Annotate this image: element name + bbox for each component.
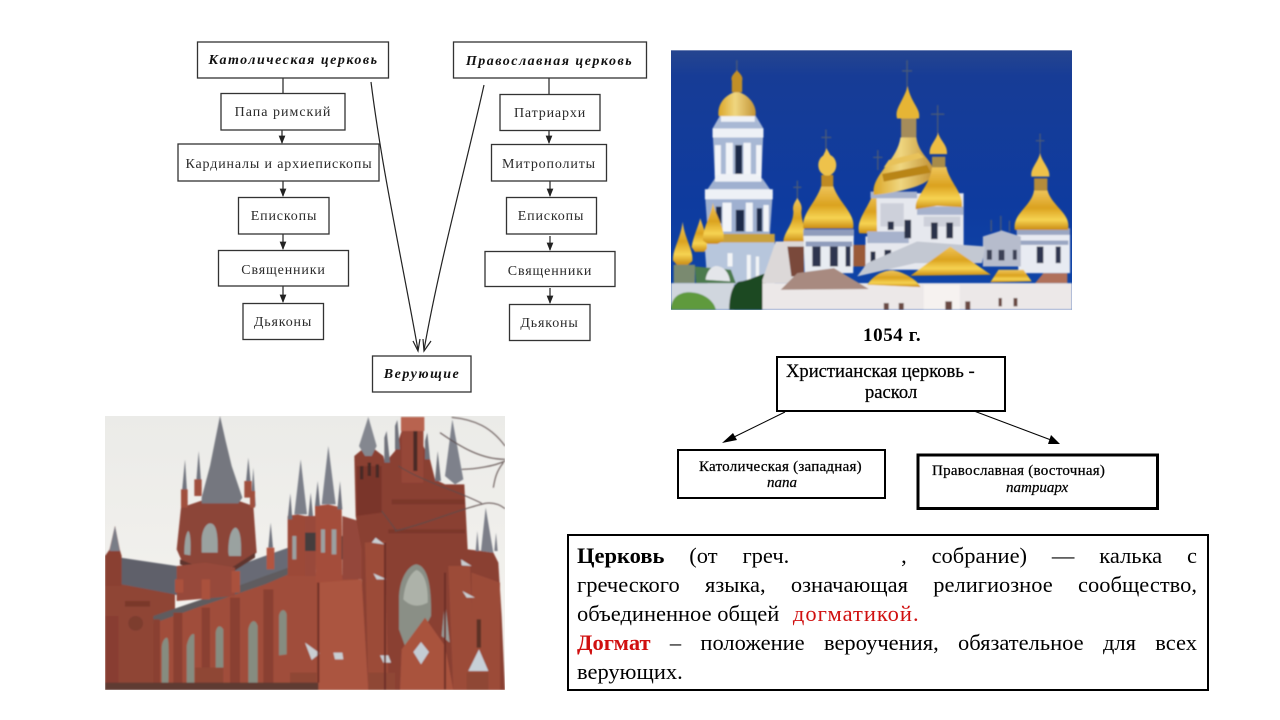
box: Priests left: Священники <box>241 263 326 278</box>
right church <box>1017 230 1070 273</box>
architecture <box>671 60 1072 310</box>
crosses <box>737 60 1044 232</box>
mid-left white block <box>762 242 804 283</box>
box: Bishops left <box>238 198 329 234</box>
box: Deacons left: Дьяконы <box>254 315 312 330</box>
windows <box>162 601 353 690</box>
box: Catholic western <box>678 450 885 498</box>
box: Orthodox eastern: Православная (восточная) <box>932 463 1105 479</box>
portal <box>400 618 453 690</box>
lines of brick shadow <box>318 543 445 690</box>
definition text box: Догмат – положение вероучения, обязательное для всех <box>577 630 1197 655</box>
box: Catholic western: Католическая (западная) <box>699 459 862 475</box>
bare branches <box>382 417 505 531</box>
box: Pope: Папа римский <box>235 105 331 120</box>
box: Metropolitans <box>492 144 606 181</box>
box: Catholic church <box>198 42 388 78</box>
dome 370 <box>783 198 806 243</box>
box: Orthodox church <box>454 42 646 78</box>
box: Christian church schism <box>777 357 1005 411</box>
definition text box <box>567 534 1209 691</box>
box: Christian church schism: раскол <box>865 382 917 403</box>
bell tower dome <box>718 92 756 116</box>
buttress pinnacle towers <box>288 514 307 576</box>
box: Believers: Верующие <box>383 367 460 382</box>
box: Pope <box>221 94 345 130</box>
box: Catholic western: папа <box>767 475 797 491</box>
small stone caps <box>305 538 475 663</box>
box: Bishops right <box>506 198 596 234</box>
sky <box>105 416 505 690</box>
left wing <box>105 583 175 690</box>
box: Deacons right <box>510 304 590 340</box>
definition text box: объединенное общей догматикой. <box>577 601 920 626</box>
small block <box>983 231 1021 266</box>
photo: Orthodox cathedral with golden domes <box>671 50 1072 310</box>
central church <box>866 193 964 270</box>
box: Patriarchs <box>500 94 600 130</box>
right central dome <box>916 167 962 209</box>
arrow: to Orthodox branch <box>974 411 1060 444</box>
box: Bishops left: Епископы <box>251 209 317 224</box>
box: Orthodox church: Православная церковь <box>465 54 633 69</box>
box: Bishops right: Епископы <box>518 209 584 224</box>
main tower <box>354 431 505 690</box>
dome 595 <box>859 193 884 234</box>
bell tower <box>713 114 763 178</box>
definition text box: греческого языка, означающая религиозное сообщество, <box>577 572 1197 597</box>
center wall <box>153 571 368 690</box>
building <box>105 416 505 690</box>
box: Deacons left <box>243 304 324 340</box>
definition text box: верующих. <box>577 659 683 684</box>
box: Deacons right: Дьяконы <box>520 316 579 331</box>
definition text box: Церковь (от греч. , собрание) — калька с <box>577 543 1197 568</box>
box: Christian church schism: Христианская церковь - <box>786 361 975 382</box>
box: Orthodox eastern <box>918 455 1158 508</box>
box: Priests left <box>218 250 348 286</box>
arrow: to Catholic branch <box>722 412 785 443</box>
box: Priests right <box>485 252 615 286</box>
big central dome <box>874 137 933 195</box>
date heading: 1054: 1054 г. <box>863 325 921 346</box>
connectors: Orthodox column <box>549 78 550 303</box>
dome 470 church <box>803 230 854 273</box>
arrow: Orthodox church to believers <box>423 85 484 351</box>
arrow: Catholic church to believers <box>371 82 420 351</box>
sky <box>671 50 1072 310</box>
box: Cardinals: Кардиналы и архиепископы <box>185 157 373 172</box>
box: Orthodox eastern: патриарх <box>1006 480 1069 496</box>
schism diagram <box>677 325 1159 510</box>
box: Catholic church: Католическая церковь <box>207 53 379 68</box>
flowchart: church hierarchy <box>177 41 648 393</box>
box: Metropolitans: Митрополиты <box>502 157 596 172</box>
rose window <box>399 564 431 646</box>
photo: red-brick Catholic cathedral <box>105 416 505 690</box>
box: Believers <box>372 356 471 392</box>
lower facade <box>318 579 368 690</box>
low white building <box>762 283 1072 310</box>
connectors: Catholic column <box>282 78 283 302</box>
grey roofs <box>105 555 202 598</box>
box: Cardinals <box>178 144 379 181</box>
small left domes <box>673 222 692 265</box>
tower left <box>177 494 257 573</box>
box: Patriarchs: Патриархи <box>514 106 586 121</box>
box: Priests right: Священники <box>508 264 592 279</box>
